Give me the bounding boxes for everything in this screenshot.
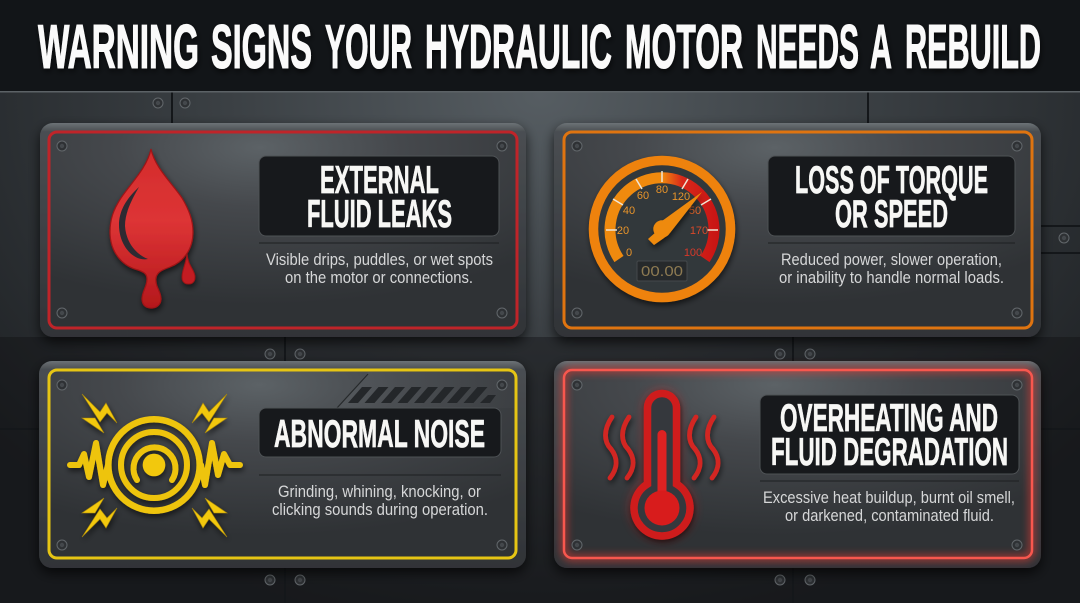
heading box: abnormal noise: ABNORMAL NOISE: [274, 413, 485, 456]
heading box: overheating and fluid degradation: [760, 395, 1019, 474]
gauge labels: 0: [626, 247, 632, 259]
panel: loss of torque or speed: [554, 123, 1041, 337]
description: overheating and fluid degradation: [763, 489, 1015, 525]
heading box: abnormal noise: [259, 408, 501, 457]
description: abnormal noise: Grinding, whining, knocking, or: [278, 483, 481, 501]
digital readout: 00.00: [641, 263, 683, 280]
description: loss of torque or speed: or inability to handle normal loads.: [779, 269, 1004, 287]
gauge needle: [648, 192, 702, 245]
panel: external fluid leaks: [40, 123, 526, 337]
title: YOUR: [325, 13, 412, 82]
description: loss of torque or speed: Reduced power, slower operation,: [781, 251, 1002, 269]
title: [38, 13, 1041, 82]
panel: overheating and fluid degradation: [554, 361, 1041, 568]
hazard stripes: [337, 372, 514, 408]
gauge labels: 60: [637, 190, 649, 202]
title: WARNING: [38, 13, 199, 82]
heading box: loss of torque or speed: OR SPEED: [835, 193, 948, 236]
description: overheating and fluid degradation: or darkened, contaminated fluid.: [785, 507, 994, 525]
heading box: external fluid leaks: FLUID LEAKS: [307, 193, 452, 236]
title: A: [870, 13, 892, 82]
gauge labels: 50: [689, 205, 701, 217]
gauge labels: 100: [684, 247, 702, 259]
description: abnormal noise: [272, 483, 488, 519]
title: HYDRAULIC: [425, 13, 612, 82]
gauge labels: 20: [617, 225, 629, 237]
heading box: external fluid leaks: EXTERNAL: [320, 159, 439, 202]
description: external fluid leaks: [266, 251, 493, 287]
icon: thermometer with heat waves: [606, 394, 718, 536]
gauge labels: [617, 184, 708, 259]
title: SIGNS: [211, 13, 312, 82]
icon: speedometer gauge: [594, 160, 730, 298]
description: external fluid leaks: Visible drips, puddles, or wet spots: [266, 251, 493, 269]
gauge labels: 120: [672, 191, 690, 203]
description: loss of torque or speed: [779, 251, 1004, 287]
heading box: loss of torque or speed: [768, 156, 1015, 236]
gauge scale arc: [610, 178, 714, 259]
description: overheating and fluid degradation: Excessive heat buildup, burnt oil smell,: [763, 489, 1015, 507]
icon: blood-red fluid drop: [110, 149, 195, 308]
description: abnormal noise: clicking sounds during operation.: [272, 501, 488, 519]
title: NEEDS: [756, 13, 859, 82]
heading box: external fluid leaks: [259, 156, 499, 236]
title: MOTOR: [625, 13, 743, 82]
description: external fluid leaks: on the motor or connections.: [285, 269, 473, 287]
icon: noise vibration rings: [70, 394, 240, 537]
gauge labels: 40: [623, 205, 635, 217]
panel: abnormal noise: [39, 361, 526, 568]
header band: [0, 0, 1080, 92]
gauge labels: 170: [690, 225, 708, 237]
gauge labels: 80: [656, 184, 668, 196]
